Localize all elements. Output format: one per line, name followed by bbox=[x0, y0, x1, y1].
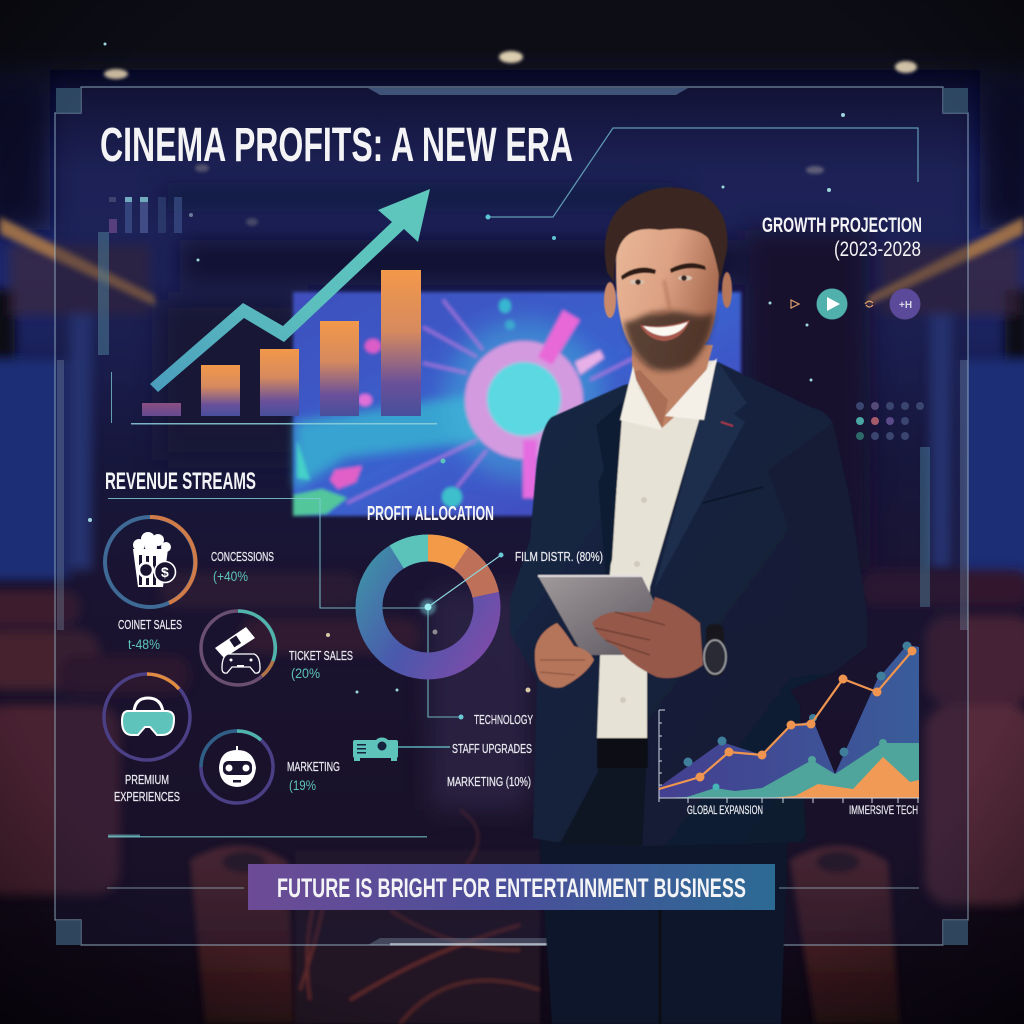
hair bbox=[605, 187, 727, 282]
allocation labels: STAFF UPGRADES bbox=[452, 741, 532, 756]
orange line bbox=[659, 651, 912, 789]
axis bbox=[659, 710, 919, 803]
media controls: +H bbox=[899, 300, 912, 311]
revenue item: ticket sales bbox=[201, 611, 353, 685]
donut center node and leaders bbox=[420, 552, 504, 720]
revenue streams heading: REVENUE STREAMS bbox=[105, 468, 256, 495]
left hand bbox=[535, 623, 594, 688]
area and line chart bbox=[659, 642, 919, 817]
trouser gap bbox=[560, 738, 648, 846]
revenue item: concessions: (+40% bbox=[213, 569, 248, 584]
revenue item: ticket sales: (20% bbox=[291, 666, 320, 681]
revenue item: concessions: CONCESSIONS bbox=[211, 549, 274, 564]
bottom rule bbox=[108, 834, 427, 838]
revenue item: premium experiences bbox=[104, 674, 190, 804]
seats bbox=[0, 570, 1024, 905]
right hand bbox=[592, 597, 703, 678]
revenue item: premium experiences: EXPERIENCES bbox=[114, 789, 180, 804]
collar bbox=[620, 366, 662, 430]
revenue item: marketing: (19% bbox=[289, 778, 316, 793]
glass panel overlay bbox=[55, 87, 968, 946]
decorative tick bars bbox=[98, 197, 182, 423]
icon: robot head bbox=[219, 746, 256, 787]
revenue item: marketing bbox=[201, 731, 340, 803]
media controls bbox=[791, 288, 920, 320]
revenue item: coinet sales label: COINET SALES bbox=[118, 617, 182, 632]
revenue item: coinet sales label: t-48% bbox=[128, 637, 160, 652]
revenue item: ticket sales: TICKET SALES bbox=[289, 648, 353, 663]
head bbox=[616, 219, 719, 372]
left lapel shade bbox=[596, 402, 622, 580]
nose bbox=[650, 280, 670, 314]
trousers bbox=[539, 830, 788, 1024]
right sleeve bbox=[722, 423, 868, 683]
donut chart bbox=[369, 548, 487, 666]
baseline bbox=[131, 423, 437, 424]
allocation labels bbox=[447, 549, 603, 789]
heading: growth projection: GROWTH PROJECTION bbox=[762, 214, 922, 237]
connector lines to donut bbox=[108, 498, 460, 717]
shirt bbox=[597, 360, 717, 738]
icon: popcorn with coin bbox=[133, 532, 176, 587]
beard bbox=[624, 311, 714, 371]
revenue item: marketing: MARKETING bbox=[287, 759, 340, 774]
carpet pattern bbox=[295, 810, 770, 1024]
revenue item: premium experiences: PREMIUM bbox=[125, 772, 169, 787]
icon: popcorn with coin: $ bbox=[161, 564, 169, 580]
axis captions: GLOBAL EXPANSION bbox=[687, 803, 763, 817]
jacket bbox=[510, 362, 868, 846]
area and line chart: IMMERSIVE TECH bbox=[849, 803, 918, 817]
tablet bbox=[538, 576, 662, 655]
revenue item: coinet sales label bbox=[118, 617, 182, 652]
allocation labels: FILM DISTR. (80%) bbox=[515, 549, 603, 564]
decorative connector: title to growth projection bbox=[488, 128, 918, 217]
bars bbox=[142, 403, 181, 416]
title: CINEMA PROFITS: A NEW ERA bbox=[100, 119, 573, 172]
banner: FUTURE IS BRIGHT FOR ENTERTAINMENT BUSINESS bbox=[277, 873, 746, 903]
neck bbox=[632, 345, 713, 428]
mouth bbox=[640, 320, 690, 341]
arrow bbox=[150, 189, 430, 392]
revenue item: concessions bbox=[105, 517, 274, 607]
banner bbox=[107, 864, 919, 910]
watch bbox=[704, 624, 726, 676]
allocation labels: MARKETING (10%) bbox=[447, 774, 531, 789]
icon: ticket and game controller bbox=[215, 627, 260, 673]
belt bbox=[597, 738, 648, 768]
bar chart with growth arrow bbox=[98, 189, 437, 424]
teal markers bbox=[684, 642, 912, 766]
buttons bbox=[620, 497, 647, 703]
chest pocket bbox=[703, 487, 763, 503]
person bbox=[510, 187, 868, 1024]
profit allocation heading: PROFIT ALLOCATION bbox=[367, 503, 494, 525]
allocation labels: TECHNOLOGY bbox=[474, 712, 533, 727]
icon: vr headset bbox=[122, 698, 174, 735]
dot matrix bbox=[856, 402, 930, 607]
icon: projector bbox=[353, 738, 450, 761]
cinema screen bbox=[293, 292, 741, 516]
eyes and brows bbox=[621, 263, 706, 285]
particle dots bbox=[88, 42, 845, 823]
subheading: years: (2023-2028 bbox=[834, 238, 921, 261]
right lapel bbox=[654, 362, 747, 590]
